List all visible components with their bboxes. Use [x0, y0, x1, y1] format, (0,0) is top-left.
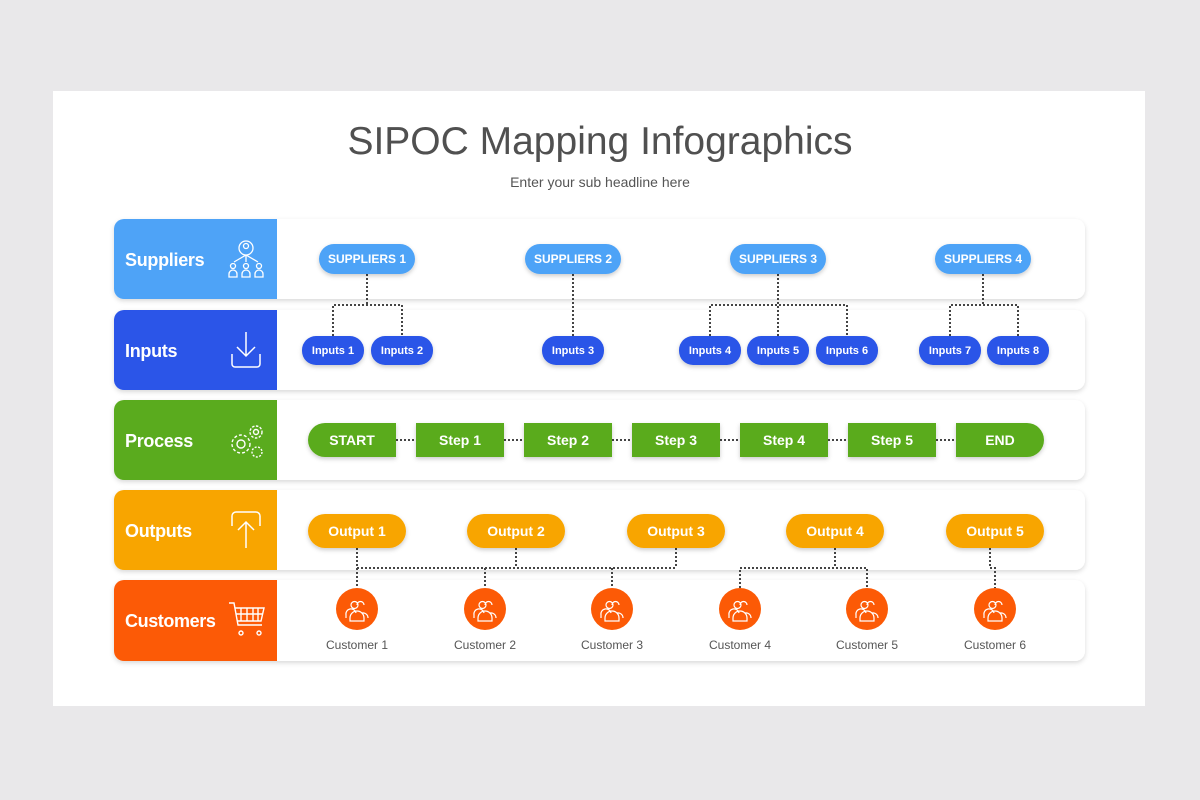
process steps: Step 4 — [763, 432, 805, 448]
inputs pills: Inputs 4 — [689, 345, 732, 357]
icon: hierarchy people — [229, 241, 263, 277]
inputs pills: Inputs 2 — [381, 345, 423, 357]
title: SIPOC Mapping Infographics — [347, 120, 853, 163]
inputs pills: Inputs 3 — [552, 345, 594, 357]
outputs pills: Output 1 — [328, 523, 386, 539]
subtitle: Enter your sub headline here — [510, 174, 690, 190]
customers: Customer 3 — [581, 638, 643, 652]
panel: outputs label: Outputs — [125, 521, 192, 541]
panel: customers label — [114, 580, 277, 661]
icon: cart — [229, 603, 264, 635]
customers — [326, 588, 1026, 652]
outputs pills: Output 5 — [966, 523, 1024, 539]
inputs pills: Inputs 5 — [757, 345, 799, 357]
connectors — [333, 274, 1018, 588]
panel: process label — [114, 400, 277, 480]
process steps: END — [985, 432, 1015, 448]
suppliers pills: SUPPLIERS 2 — [534, 252, 612, 266]
row backgrounds — [114, 219, 1085, 661]
process steps: Step 1 — [439, 432, 481, 448]
inputs pills: Inputs 8 — [997, 345, 1039, 357]
panel: inputs label: Inputs — [125, 341, 177, 361]
icon: upload — [232, 512, 260, 548]
outputs pills: Output 4 — [806, 523, 864, 539]
panel: outputs label — [114, 490, 277, 570]
panel: suppliers label — [114, 219, 277, 299]
suppliers pills: SUPPLIERS 3 — [739, 252, 817, 266]
outputs pills — [308, 514, 1044, 548]
customers: Customer 2 — [454, 638, 516, 652]
customers: Customer 1 — [326, 638, 388, 652]
inputs pills: Inputs 7 — [929, 345, 971, 357]
customers: Customer 5 — [836, 638, 898, 652]
suppliers pills: SUPPLIERS 1 — [328, 252, 406, 266]
panel: suppliers label: Suppliers — [125, 250, 205, 270]
process steps — [308, 423, 1044, 457]
suppliers pills: SUPPLIERS 4 — [944, 252, 1022, 266]
inputs pills — [302, 336, 1049, 365]
process steps: START — [329, 432, 375, 448]
icon: gears — [232, 426, 262, 457]
process steps: Step 3 — [655, 432, 697, 448]
customers: Customer 4 — [709, 638, 771, 652]
inputs pills: Inputs 1 — [312, 345, 354, 357]
card — [53, 91, 1145, 706]
icon: download — [232, 332, 260, 367]
suppliers pills — [319, 244, 1031, 274]
inputs pills: Inputs 6 — [826, 345, 868, 357]
process steps: Step 5 — [871, 432, 913, 448]
panel: customers label: Customers — [125, 611, 216, 631]
panel: inputs label — [114, 310, 277, 390]
panel: process label: Process — [125, 431, 193, 451]
process steps: Step 2 — [547, 432, 589, 448]
outputs pills: Output 2 — [487, 523, 545, 539]
customers: Customer 6 — [964, 638, 1026, 652]
outputs pills: Output 3 — [647, 523, 705, 539]
